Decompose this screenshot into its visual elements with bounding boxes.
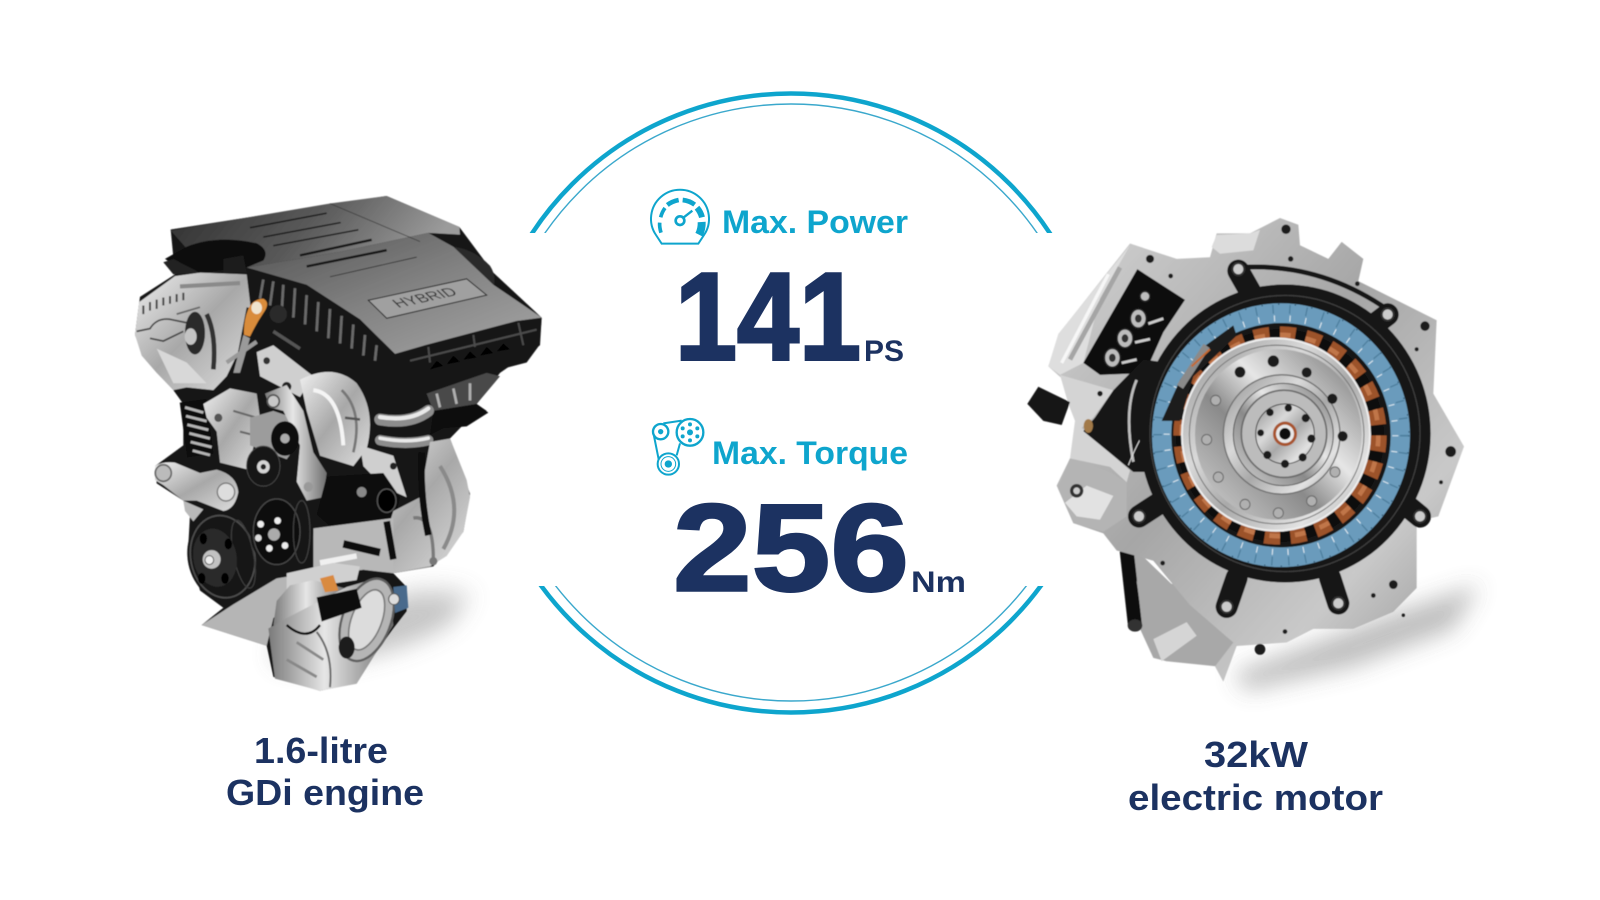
plate holes	[1097, 224, 1456, 655]
upper centre bracket	[257, 345, 313, 397]
engine silhouette	[135, 196, 542, 691]
cover slots	[250, 204, 420, 277]
electric motor illustration	[1027, 218, 1480, 690]
timing case details	[137, 283, 240, 369]
hybrid nameplate	[368, 279, 487, 318]
flywheel inner ring	[1223, 375, 1340, 494]
label: motor	[1128, 734, 1383, 818]
left bracket	[1060, 375, 1130, 482]
throttle body behind cover	[443, 247, 494, 286]
left inverter housing	[1048, 245, 1130, 375]
vertical silver arm	[265, 385, 327, 501]
lower coolant fittings	[1127, 550, 1207, 661]
water pump housing dark	[317, 473, 400, 535]
oil filler cap	[165, 240, 266, 273]
motor label line 1: 32kW	[1204, 734, 1308, 775]
lug bolts	[1133, 263, 1426, 613]
unit: Nm: Nm	[911, 566, 966, 599]
top plate	[171, 196, 460, 267]
cover slope	[247, 233, 542, 354]
outer black seal ring	[1139, 284, 1431, 583]
value: 256: 256	[673, 480, 909, 618]
wire bundle gap	[1162, 325, 1237, 421]
lower-left casting	[1058, 458, 1127, 532]
dark cap near dipstick	[270, 305, 287, 323]
lower centre silver	[313, 518, 393, 577]
blue insulation ring	[1153, 304, 1409, 566]
heading: max torque: Max. Torque	[712, 435, 908, 471]
lower arc	[538, 586, 1044, 715]
water pump pulley	[250, 494, 313, 570]
left timing case	[135, 273, 251, 390]
flywheel disc	[1189, 345, 1364, 524]
black coolant hose	[421, 452, 428, 535]
alternator housing	[300, 372, 370, 466]
black ring lugs and top arc	[1139, 267, 1420, 607]
silver block	[203, 388, 260, 470]
engine shadow	[267, 584, 473, 680]
dark mid engine void	[233, 307, 333, 376]
motor shadow	[1233, 585, 1480, 690]
engine label line 2: GDi engine	[226, 772, 424, 813]
right bell housing	[360, 438, 470, 573]
icon: speedometer	[651, 190, 709, 244]
coolant pipes	[380, 408, 428, 443]
A/C compressor	[268, 571, 408, 691]
black connector	[1027, 387, 1070, 425]
mounting plate	[1048, 218, 1464, 682]
icon: belt and pulleys	[653, 419, 703, 475]
engine illustration	[135, 196, 542, 691]
engine label line 1: 1.6-litre	[254, 730, 388, 771]
small silver fill at centre	[250, 411, 297, 459]
wiring connector	[430, 404, 488, 435]
stator winding	[1176, 329, 1384, 542]
label: engine	[226, 730, 424, 813]
value: 141: 141	[675, 248, 861, 386]
oil dipstick	[233, 299, 267, 373]
terminal block	[1083, 269, 1185, 375]
hybrid nameplate: HYBRID	[389, 285, 462, 311]
coil spring tensioner	[180, 399, 214, 457]
left accessory bracket	[155, 462, 238, 511]
unit: PS: PS	[864, 335, 904, 368]
central hub	[1256, 404, 1315, 468]
cable pocket	[1083, 360, 1193, 472]
flywheel rim	[1182, 338, 1370, 531]
lower mount silver	[202, 577, 300, 646]
upper arc	[530, 91, 1052, 233]
airbox front	[393, 318, 542, 401]
heading: max power: Max. Power	[722, 204, 908, 240]
motor label line 2: electric motor	[1128, 777, 1383, 818]
flywheel bolts	[1202, 395, 1340, 518]
intake manifold	[427, 373, 500, 411]
crank pulley	[179, 505, 266, 608]
stator assembly	[1133, 263, 1431, 613]
top cast lug	[1212, 230, 1260, 254]
lower casting backing	[1133, 547, 1237, 666]
flywheel holes	[1235, 355, 1348, 441]
ribbed side of cover	[250, 273, 397, 371]
idler pulleys	[247, 421, 299, 486]
